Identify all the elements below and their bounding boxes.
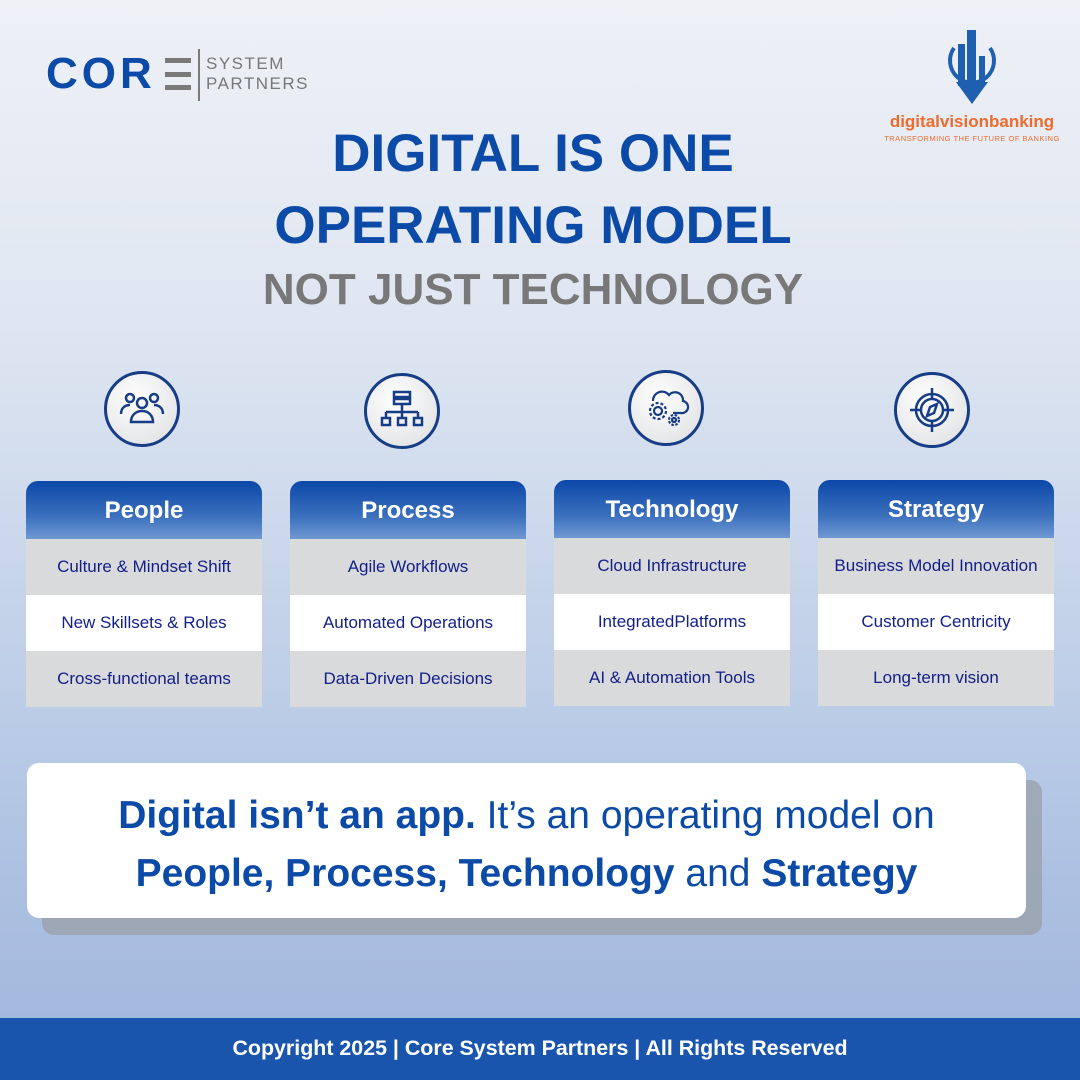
header: strategy [818,480,1054,538]
footer: Copyright 2025 | Core System Partners | All Rights Reserved [232,1036,848,1060]
panel: process: Data-Driven Decisions [323,669,493,688]
icon: process [364,373,440,449]
panel: strategy: Long-term vision [873,668,999,687]
panel: process [290,481,526,707]
header: technology: Technology [606,496,738,523]
icon: strategy [894,372,970,448]
panel: people: Cross-functional teams [57,669,231,688]
footer [0,1018,1080,1080]
callout: Digital isn’t an app. It’s an operating model on [118,794,935,837]
logo: digitalvisionbanking: digitalvisionbanking [890,112,1054,131]
logo: core system partners: COR [46,49,156,98]
logo: digitalvisionbanking [884,30,1060,143]
panel: people: New Skillsets & Roles [61,613,227,632]
panel: strategy: Business Model Innovation [834,556,1038,575]
header: strategy: Strategy [888,496,984,523]
logo: core system partners: SYSTEM [206,54,285,73]
logo: core system partners: PARTNERS [206,74,309,93]
panel: process: Agile Workflows [348,557,468,576]
icon: people [104,371,180,447]
title [274,124,792,255]
panel: technology: IntegratedPlatforms [598,612,746,631]
panel: process: Automated Operations [323,613,493,632]
callout: People, Process, Technology and Strategy [136,852,917,895]
icon: technology [628,370,704,446]
panel: technology [554,480,790,706]
header: process: Process [361,497,455,524]
panel: strategy [818,480,1054,706]
logo: digitalvisionbanking: TRANSFORMING THE FUTURE OF BANKING [884,134,1060,143]
title: DIGITAL IS ONE [332,124,734,183]
callout shadow [42,780,1042,935]
header: process [290,481,526,539]
panel: people [26,481,262,707]
subtitle: NOT JUST TECHNOLOGY [263,265,803,314]
header: people [26,481,262,539]
panel: technology: AI & Automation Tools [589,668,755,687]
callout [27,763,1026,918]
title: OPERATING MODEL [274,196,792,255]
panel: people: Culture & Mindset Shift [57,557,231,576]
header: people: People [105,497,183,524]
header: technology [554,480,790,538]
panel: technology: Cloud Infrastructure [597,556,747,575]
panel: strategy: Customer Centricity [861,612,1011,631]
logo: core system partners [46,49,309,101]
